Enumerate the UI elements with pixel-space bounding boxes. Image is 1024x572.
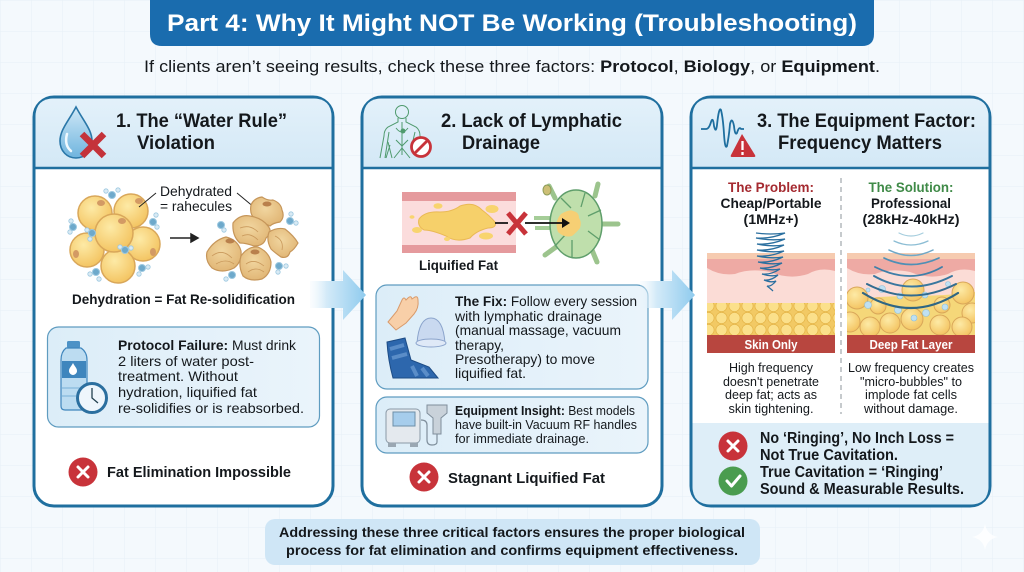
panel header 3 [691, 98, 990, 168]
status: fat elimination impossible: Fat Elimination Impossible [107, 465, 291, 481]
panel header 2: Drainage [462, 133, 540, 154]
verdict: not true cavitation [718, 430, 954, 464]
diagram: lymph node [534, 184, 618, 262]
callout: equipment insight [376, 397, 648, 453]
verdict: not true cavitation: Not True Cavitation. [760, 447, 898, 464]
footer summary: process for fat elimination and confirms equipment effectiveness. [286, 542, 738, 558]
description: low frequency: "micro-bubbles" to [860, 375, 962, 389]
caption: liquified fat: Liquified Fat [419, 257, 498, 273]
panel header 1: 1. The “Water Rule” [116, 111, 287, 132]
callout: equipment insight: Equipment Insight: Best models [455, 404, 635, 418]
callout: the fix: (manual massage, vacuum [455, 322, 621, 338]
description: high frequency: doesn't penetrate [723, 375, 819, 389]
icon: lymphatic body with prohibition sign [380, 106, 430, 158]
diagram: skin cross-section, deep penetration [840, 233, 982, 353]
diagram: skin cross-section, deep penetration: Deep Fat Layer [870, 338, 953, 352]
callout: the fix: therapy, [455, 337, 504, 353]
dehydrated label: = rahecules [160, 198, 232, 214]
description: high frequency [723, 361, 819, 416]
shrunken fat cells [207, 197, 298, 280]
water molecules [68, 188, 298, 281]
column: the solution: (28kHz-40kHz) [862, 211, 960, 227]
diagram: skin cross-section, shallow penetration [707, 233, 835, 353]
icon: waveform with warning sign [701, 109, 755, 157]
arrow: blocked drainage with cross [495, 213, 570, 234]
callout: the fix: liquified fat. [455, 365, 526, 381]
callout: equipment insight: for immediate drainage. [455, 432, 589, 446]
callout: the fix [376, 285, 648, 389]
panel: water rule violation [34, 97, 333, 506]
subtitle: If clients aren’t seeing results, check these three factors: Protocol , Biology, or Equipment . [144, 57, 880, 76]
caption: dehydration: Dehydration = Fat Re-solidification [72, 291, 295, 307]
arrow: panel 1 to panel 2 [310, 270, 366, 320]
column: the problem: (1MHz+) [744, 211, 798, 227]
decorative sparkle [972, 524, 998, 550]
title banner [150, 0, 874, 46]
panel header 3: 3. The Equipment Factor: [757, 111, 976, 132]
icon: water bottle and clock [61, 341, 106, 412]
status: fat elimination impossible [68, 458, 291, 486]
icon: RF machine and handle [386, 405, 447, 447]
footer summary [265, 519, 760, 565]
column: the problem: The Problem: [728, 179, 814, 195]
description: high frequency: High frequency [729, 361, 814, 375]
description: high frequency: deep fat; acts as [725, 388, 817, 402]
dehydrated label [139, 183, 255, 214]
footer summary: Addressing these three critical factors ensures the proper biological [279, 524, 745, 540]
verdict: true cavitation: True Cavitation = ‘Ringing’ [760, 464, 943, 481]
icon: massage hand, vacuum cup and compression boot [387, 297, 446, 378]
column: the solution: Professional [871, 195, 951, 211]
callout: protocol failure: treatment. Without [118, 368, 238, 384]
callout: protocol failure: Protocol Failure: Must drink [118, 337, 297, 353]
title banner: Part 4: Why It Might NOT Be Working (Troubleshooting) [167, 10, 857, 37]
panel header 1: Violation [137, 133, 215, 154]
verdict: true cavitation: Sound & Measurable Results. [760, 481, 964, 498]
column: the solution: The Solution: [868, 179, 954, 195]
verdict: true cavitation [718, 464, 964, 498]
verdict band [692, 423, 988, 504]
callout: protocol failure: hydration, liquified fat [118, 384, 257, 400]
fat cells before [70, 194, 160, 283]
column: the problem [707, 179, 835, 416]
status: stagnant liquified fat: Stagnant Liquified Fat [448, 470, 605, 487]
description: high frequency: skin tightening. [728, 402, 814, 416]
panel header 1 [34, 98, 333, 168]
description: low frequency: Low frequency creates [848, 361, 974, 375]
description: low frequency: implode fat cells [865, 388, 957, 402]
dehydrated label: Dehydrated [160, 183, 232, 199]
panel header 2 [362, 98, 662, 168]
column: the solution [847, 182, 975, 416]
callout: the fix: with lymphatic drainage [454, 308, 602, 324]
icon: water drop with cross [60, 107, 104, 158]
description: low frequency [848, 361, 974, 416]
arrow: panel 2 to panel 3 [640, 270, 695, 320]
panel: the equipment factor [691, 97, 990, 506]
diagram: skin cross-section, shallow penetration: Skin Only [744, 338, 798, 352]
description: low frequency: without damage. [863, 402, 958, 416]
status: stagnant liquified fat [410, 462, 605, 492]
panel header 2: 2. Lack of Lymphatic [441, 111, 622, 132]
diagram: blocked vessel [402, 192, 516, 253]
callout: protocol failure: re-solidifies or is reabsorbed. [118, 400, 304, 416]
verdict: not true cavitation: No ‘Ringing’, No Inch Loss = [760, 430, 954, 447]
callout: the fix: The Fix: Follow every session [455, 293, 637, 309]
callout: equipment insight: have built-in Vacuum RF handles [455, 418, 637, 432]
panel header 3: Frequency Matters [778, 133, 942, 154]
panel: lack of lymphatic drainage [362, 97, 662, 506]
callout: the fix: Presotherapy) to move [455, 351, 595, 367]
callout: protocol failure: 2 liters of water post- [118, 353, 254, 369]
column: the problem: Cheap/Portable [720, 195, 822, 211]
callout: protocol failure [48, 327, 320, 427]
arrow: dehydration [170, 234, 198, 242]
